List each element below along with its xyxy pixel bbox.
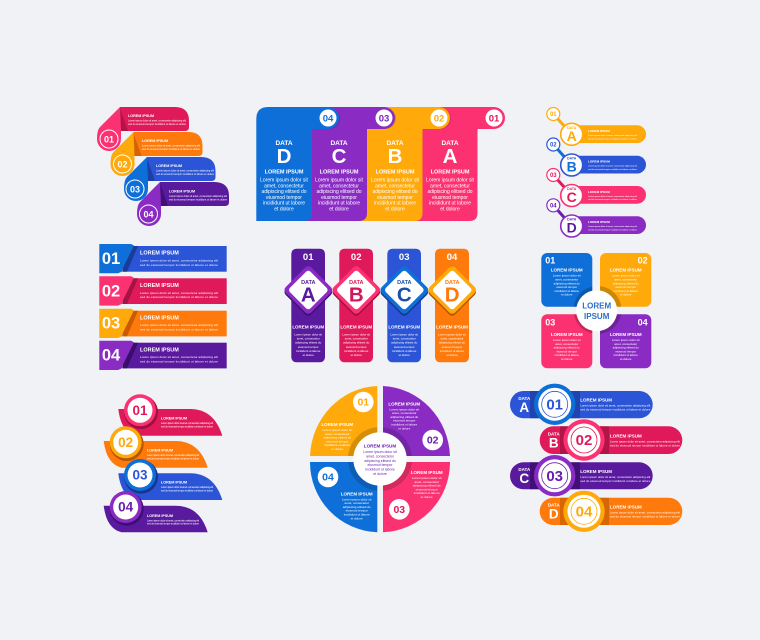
segment 04: eiusmod tempor: [346, 509, 368, 513]
square 04: Lorem ipsum dolor sit: [612, 338, 640, 342]
segment 02: 02: [427, 435, 439, 447]
row D: [547, 199, 646, 237]
ribbon 04: Lorem ipsum dolor sit amet, consectetur adipiscing elit: [169, 195, 227, 198]
center disc: amet, consectetur: [366, 454, 395, 458]
column C: incididunt ut labore: [392, 349, 417, 353]
tab B: amet, consectetur: [375, 183, 415, 189]
square 01: [541, 253, 592, 307]
column B: Lorem ipsum dolor sit: [342, 332, 370, 336]
row C: Lorem ipsum dolor sit amet, consectetur adipiscing elit: [588, 195, 637, 198]
swoosh 02: 02: [118, 435, 133, 450]
square 04: 04: [638, 318, 648, 328]
banner 04: [99, 341, 227, 370]
swoosh 03: Lorem ipsum dolor sit amet, consectetur adipiscing elit: [161, 486, 213, 489]
column A: [283, 249, 334, 362]
square 01: 01: [545, 256, 555, 266]
pill B: LOREM IPSUM: [610, 434, 642, 438]
segment 03: adipiscing elitsed do: [413, 484, 441, 488]
pill B: B: [549, 436, 559, 450]
tab A: adipiscing elitsed do: [427, 189, 473, 195]
swoosh 04: LOREM IPSUM: [147, 514, 173, 518]
square 01: et dolore: [561, 293, 573, 297]
square 02: eiusmod tempor: [615, 285, 636, 289]
banner 04: 04: [102, 347, 121, 365]
segment 04: incididunt ut labore: [344, 512, 370, 516]
banner 02: sed do eiusmod tempor incididunt ut labore et dolore: [140, 295, 218, 299]
row C: 03: [550, 173, 557, 179]
row D: DATA: [567, 218, 577, 222]
segment 04: LOREM IPSUM: [341, 491, 373, 496]
banner 03: sed do eiusmod tempor incididunt ut labore et dolore: [140, 328, 218, 332]
row A: DATA: [567, 126, 577, 130]
tab D: amet, consectetur: [264, 183, 304, 189]
pill D: LOREM IPSUM: [610, 504, 642, 510]
row D: sed do eiusmod tempor incididunt ut labore et dolore: [588, 228, 638, 231]
row A: sed do eiusmod tempor incididunt ut labore et dolore: [588, 137, 638, 140]
ribbon 04: LOREM IPSUM: [169, 190, 195, 194]
square 03: amet, consectetur: [555, 342, 578, 346]
center disc: incididunt ut labore: [365, 468, 395, 472]
tab C: LOREM IPSUM: [320, 170, 359, 176]
square 01: amet, consectetur: [555, 278, 578, 282]
column A: LOREM IPSUM: [292, 325, 324, 330]
row C: sed do eiusmod tempor incididunt ut labore et dolore: [588, 198, 638, 201]
tab D: incididunt ut labore: [263, 201, 305, 207]
column B: incididunt ut labore: [344, 349, 369, 353]
tab C: incididunt ut labore: [318, 201, 360, 207]
column D: D: [445, 284, 460, 307]
column D: adipiscing elitsed do: [439, 341, 465, 345]
banner 03: 03: [102, 315, 120, 333]
square 03: Lorem ipsum dolor sit: [553, 338, 581, 342]
column A: adipiscing elitsed do: [295, 341, 322, 345]
tab A: Lorem ipsum dolor sit: [426, 178, 475, 184]
tab B: B: [388, 145, 402, 168]
column C: et dolore: [399, 353, 410, 357]
column C: Lorem ipsum dolor sit: [390, 332, 418, 336]
segment 02: incididunt ut labore: [391, 422, 418, 426]
ribbon 01: [97, 107, 189, 151]
segment 04: et dolore: [351, 516, 363, 520]
square 04: amet, consectetur: [614, 342, 637, 346]
column A: eiusmod tempor: [298, 345, 319, 349]
row B: B: [567, 158, 577, 174]
segment 01: [310, 386, 377, 456]
ribbon 03: 03: [130, 184, 140, 194]
pill C: sed do eiusmod tempor incididunt ut labore et dolore: [580, 479, 651, 483]
column B: LOREM IPSUM: [340, 325, 372, 330]
segment 02: et dolore: [398, 426, 411, 430]
square 02: [600, 253, 651, 307]
row A: LOREM IPSUM: [588, 129, 610, 133]
square 03: eiusmod tempor: [556, 349, 577, 353]
segment 01: Lorem ipsum dolor sit: [323, 428, 352, 432]
square 01: eiusmod tempor: [556, 285, 577, 289]
tab C: amet, consectetur: [319, 183, 359, 189]
column C: LOREM IPSUM: [388, 325, 420, 330]
ribbon 01: 01: [104, 134, 114, 144]
column B: B: [349, 284, 364, 307]
swoosh 01: [118, 394, 222, 436]
panel: folded ribbon list: [97, 107, 229, 226]
row B: [547, 138, 646, 176]
column B: adipiscing elitsed do: [343, 341, 370, 345]
tab D: adipiscing elitsed do: [261, 189, 307, 195]
column B: amet, consectetur: [345, 336, 368, 340]
panel: pill bars with rings: [510, 384, 682, 532]
ribbon 03: Lorem ipsum dolor sit amet, consectetur adipiscing elit: [156, 170, 214, 172]
column A: 01: [303, 252, 314, 263]
square 03: et dolore: [561, 357, 573, 361]
tab D: LOREM IPSUM: [265, 170, 304, 176]
segment 02: LOREM IPSUM: [388, 401, 420, 406]
swoosh 02: sed do eiusmod tempor incididunt ut labore et dolore: [147, 457, 200, 460]
row B: DATA: [567, 156, 577, 160]
banner 01: 01: [102, 250, 120, 268]
row D: 04: [550, 204, 557, 210]
square 04: LOREM IPSUM: [610, 332, 642, 337]
segment 01: et dolore: [331, 447, 344, 451]
square 02: 02: [638, 256, 648, 266]
banner 01: [99, 244, 227, 273]
tab A: et dolore: [440, 206, 460, 212]
tab A: 01: [489, 114, 500, 124]
square 02: LOREM IPSUM: [610, 268, 642, 273]
segment 02: adipiscing elitsed do: [390, 415, 419, 419]
column C: eiusmod tempor: [394, 345, 415, 349]
pill A: [510, 384, 653, 425]
ribbon 01: Lorem ipsum dolor sit amet, consectetur adipiscing elit: [128, 120, 186, 122]
swoosh 04: [104, 491, 208, 532]
swoosh 04: sed do eiusmod tempor incididunt ut labore et dolore: [147, 523, 200, 526]
square 04: incididunt ut labore: [614, 353, 638, 357]
banner 04: LOREM IPSUM: [140, 347, 179, 353]
column D: 04: [447, 252, 458, 263]
ribbon 03: sed do eiusmod tempor incididunt ut labore et dolore: [156, 173, 215, 176]
tab B: et dolore: [385, 206, 405, 212]
swoosh 03: sed do eiusmod tempor incididunt ut labore et dolore: [161, 489, 214, 492]
segment 02: amet, consectetur: [392, 411, 417, 415]
swoosh 01: 01: [132, 403, 148, 418]
tab B: LOREM IPSUM: [376, 170, 415, 176]
tab B: DATA: [386, 140, 404, 147]
tab D: Lorem ipsum dolor sit: [260, 178, 309, 184]
pill B: [540, 419, 682, 461]
pill D: D: [549, 506, 559, 522]
column C: amet, consectetur: [393, 336, 416, 340]
swoosh 01: LOREM IPSUM: [161, 417, 187, 421]
row B: sed do eiusmod tempor incididunt ut labore et dolore: [588, 168, 638, 171]
row B: LOREM IPSUM: [588, 160, 610, 164]
pill A: 01: [546, 396, 563, 414]
ribbon 04: sed do eiusmod tempor incididunt ut labore et dolore: [169, 198, 228, 201]
square 01: Lorem ipsum dolor sit: [553, 274, 581, 278]
pill C: DATA: [518, 467, 531, 472]
swoosh 03: [118, 459, 222, 500]
tab A: [416, 107, 505, 221]
column A: Lorem ipsum dolor sit: [294, 332, 322, 336]
center disc: adipiscing elitsed do: [364, 459, 396, 463]
segment 02: Lorem ipsum dolor sit: [390, 407, 419, 411]
ribbon 03: [124, 157, 216, 201]
column C: C: [397, 284, 412, 307]
pill D: [540, 491, 682, 532]
tab B: [361, 107, 451, 221]
segment 03: et dolore: [421, 495, 433, 499]
tab D: D: [277, 145, 291, 168]
row A: 01: [550, 112, 557, 118]
swoosh 02: Lorem ipsum dolor sit amet, consectetur adipiscing elit: [147, 454, 199, 457]
column A: A: [301, 284, 316, 307]
center disc: LOREM IPSUM: [364, 444, 396, 448]
tab D: eiusmod tempor: [266, 195, 302, 201]
square 02: incididunt ut labore: [614, 289, 638, 293]
segment 01: incididunt ut labore: [324, 443, 351, 447]
center circle: LOREM: [582, 301, 611, 310]
column A: et dolore: [303, 353, 314, 357]
tab A: LOREM IPSUM: [431, 170, 470, 176]
column D: eiusmod tempor: [442, 345, 462, 349]
column D: LOREM IPSUM: [436, 325, 468, 330]
swoosh 01: Lorem ipsum dolor sit amet, consectetur adipiscing elit: [161, 422, 213, 425]
tab A: incididunt ut labore: [429, 201, 471, 207]
tab C: 03: [379, 114, 389, 124]
column A: incididunt ut labore: [296, 349, 321, 353]
pill D: DATA: [548, 502, 560, 508]
pill A: sed do eiusmod tempor incididunt ut labore et dolore: [580, 408, 651, 412]
square 01: incididunt ut labore: [555, 289, 579, 293]
banner 01: sed do eiusmod tempor incididunt ut labore et dolore: [140, 263, 218, 267]
pill B: Lorem ipsum dolor sit amet, consectetur adipiscing elit: [610, 439, 680, 443]
tab A: A: [443, 145, 458, 168]
row D: D: [567, 220, 577, 236]
square 04: adipiscing elitsed do: [613, 346, 639, 350]
column C: 03: [399, 252, 409, 263]
center circle: [576, 290, 617, 331]
pill D: 04: [576, 504, 593, 520]
swoosh 01: sed do eiusmod tempor incididunt ut labore et dolore: [161, 425, 214, 428]
banner 04: sed do eiusmod tempor incididunt ut labore et dolore: [140, 360, 218, 364]
segment 03: amet, consectetur: [414, 480, 439, 484]
column B: eiusmod tempor: [346, 345, 367, 349]
ribbon 03: LOREM IPSUM: [156, 164, 182, 168]
swoosh 02: [104, 426, 208, 468]
row A: [547, 108, 646, 145]
ribbon 01: sed do eiusmod tempor incididunt ut labore et dolore: [128, 123, 187, 126]
banner 02: LOREM IPSUM: [140, 283, 179, 289]
panel: diamond columns: [283, 249, 478, 362]
banner 03: LOREM IPSUM: [140, 315, 179, 321]
column C: adipiscing elitsed do: [391, 341, 418, 345]
segment 03: eiusmod tempor: [416, 487, 438, 491]
square 04: et dolore: [620, 357, 632, 361]
segment 03: [383, 462, 450, 532]
segment 02: eiusmod tempor: [393, 419, 415, 423]
swoosh 03: 03: [132, 468, 148, 483]
ribbon 02: 02: [117, 159, 128, 169]
center disc: et dolore: [373, 472, 387, 476]
tab C: adipiscing elitsed do: [316, 189, 362, 195]
banner 01: LOREM IPSUM: [140, 251, 179, 257]
banner 02: Lorem ipsum dolor sit amet, consectetur adipiscing elit: [140, 291, 218, 295]
pill A: DATA: [518, 396, 531, 401]
pill B: sed do eiusmod tempor incididunt ut labore et dolore: [610, 443, 680, 447]
segment 01: amet, consectetur: [325, 432, 350, 436]
tab D: [256, 107, 340, 221]
column C: [379, 249, 430, 362]
row D: LOREM IPSUM: [588, 220, 610, 224]
segment 02: [383, 386, 450, 456]
swoosh 02: LOREM IPSUM: [147, 449, 173, 453]
square 03: adipiscing elitsed do: [554, 346, 580, 350]
tab B: incididunt ut labore: [374, 201, 416, 207]
ribbon 02: Lorem ipsum dolor sit amet, consectetur adipiscing elit: [142, 144, 200, 148]
column D: Lorem ipsum dolor sit: [438, 332, 466, 336]
row C: LOREM IPSUM: [588, 190, 610, 194]
tab B: Lorem ipsum dolor sit: [371, 178, 420, 184]
row B: 02: [550, 143, 557, 149]
row A: A: [567, 128, 577, 144]
column A: DATA: [301, 280, 316, 286]
tab B: adipiscing elitsed do: [372, 189, 418, 195]
pill A: A: [519, 400, 529, 415]
square 01: adipiscing elitsed do: [554, 281, 580, 285]
tab C: et dolore: [329, 206, 349, 212]
tab A: amet, consectetur: [430, 183, 470, 189]
column B: 02: [351, 252, 361, 263]
tab C: DATA: [330, 140, 348, 147]
tab C: eiusmod tempor: [321, 195, 357, 201]
square 01: LOREM IPSUM: [551, 268, 583, 273]
pill C: C: [519, 471, 529, 486]
tab D: et dolore: [274, 206, 294, 212]
panel: four squares around circle: [541, 253, 651, 368]
row B: Lorem ipsum dolor sit amet, consectetur adipiscing elit: [588, 164, 637, 168]
center circle: IPSUM: [584, 312, 610, 321]
tab D: 04: [323, 114, 334, 124]
segment 03: incididunt ut labore: [414, 491, 440, 495]
center disc: [353, 432, 407, 486]
segment 04: Lorem ipsum dolor sit: [342, 497, 372, 501]
square 03: incididunt ut labore: [555, 353, 579, 357]
pill C: [510, 455, 653, 496]
pill B: DATA: [548, 432, 560, 436]
segment 01: adipiscing elitsed do: [323, 436, 352, 440]
banner 04: Lorem ipsum dolor sit amet, consectetur adipiscing elit: [140, 355, 218, 359]
panel: segmented pie: [310, 386, 450, 532]
swoosh 04: Lorem ipsum dolor sit amet, consectetur adipiscing elit: [147, 519, 199, 522]
column D: et dolore: [446, 353, 458, 357]
column D: amet, consectetur: [441, 336, 464, 340]
tab D: DATA: [275, 140, 293, 147]
segment 04: amet, consectetur: [344, 501, 369, 505]
square 02: Lorem ipsum dolor sit: [612, 274, 640, 278]
segment 01: 01: [357, 397, 369, 409]
square 03: 03: [545, 318, 555, 328]
tab B: eiusmod tempor: [377, 195, 413, 201]
banner 02: 02: [102, 282, 120, 300]
column A: amet, consectetur: [297, 336, 320, 340]
tab C: Lorem ipsum dolor sit: [315, 178, 364, 184]
banner 03: [99, 309, 227, 338]
pill A: LOREM IPSUM: [580, 398, 612, 403]
segment 03: Lorem ipsum dolor sit: [412, 476, 442, 480]
ribbon 02: sed do eiusmod tempor incididunt ut labore et dolore: [142, 148, 201, 151]
tab C: C: [332, 145, 347, 168]
panel: stacked swoosh list: [104, 394, 222, 532]
banner 01: Lorem ipsum dolor sit amet, consectetur adipiscing elit: [140, 258, 218, 262]
ribbon 02: [110, 132, 202, 176]
column B: et dolore: [351, 353, 362, 357]
pill C: LOREM IPSUM: [580, 469, 612, 474]
panel: connected circle bars: [547, 108, 646, 237]
square 03: LOREM IPSUM: [551, 332, 583, 337]
tab B: 02: [434, 114, 444, 124]
ribbon 01: LOREM IPSUM: [128, 114, 154, 118]
square 02: amet, consectetur: [614, 278, 637, 282]
segment 03: 03: [393, 504, 405, 516]
square 02: et dolore: [620, 293, 632, 297]
row A: Lorem ipsum dolor sit amet, consectetur adipiscing elit: [588, 134, 637, 137]
column C: DATA: [397, 280, 412, 286]
row C: C: [567, 189, 577, 205]
center disc: eiusmod tempor: [367, 463, 393, 467]
column B: [331, 249, 382, 362]
swoosh 03: LOREM IPSUM: [161, 481, 187, 485]
ribbon 04: 04: [143, 209, 154, 219]
segment 01: LOREM IPSUM: [321, 422, 353, 427]
row D: Lorem ipsum dolor sit amet, consectetur adipiscing elit: [588, 225, 637, 228]
pill C: Lorem ipsum dolor sit amet, consectetur adipiscing elit: [580, 475, 650, 479]
ribbon 04: [137, 182, 229, 226]
ribbon 02: LOREM IPSUM: [142, 139, 168, 143]
pill C: 03: [546, 468, 563, 485]
center disc: Lorem ipsum dolor sit: [363, 450, 397, 454]
row C: [547, 168, 646, 206]
segment 01: eiusmod tempor: [326, 439, 348, 443]
square 04: [600, 314, 651, 368]
banner 02: [99, 276, 227, 306]
tab A: DATA: [441, 140, 459, 147]
column D: DATA: [445, 280, 459, 286]
tab C: [305, 107, 396, 221]
square 03: [541, 314, 592, 368]
column D: [427, 249, 478, 362]
banner 03: Lorem ipsum dolor sit amet, consectetur adipiscing elit: [140, 323, 218, 327]
segment 04: [310, 462, 377, 532]
segment 04: adipiscing elitsed do: [343, 505, 371, 509]
pill B: 02: [576, 432, 592, 449]
segment 04: 04: [322, 472, 334, 484]
tab A: eiusmod tempor: [432, 195, 468, 201]
panel: numbered banners: [99, 244, 227, 370]
panel: overlapping data tabs: [256, 107, 505, 221]
pill D: Lorem ipsum dolor sit amet, consectetur adipiscing elit: [610, 510, 680, 514]
row C: DATA: [567, 187, 577, 191]
swoosh 04: 04: [118, 500, 134, 515]
square 04: eiusmod tempor: [615, 349, 636, 353]
column D: incididunt ut labore: [440, 349, 465, 353]
column B: DATA: [349, 280, 364, 286]
square 02: adipiscing elitsed do: [613, 281, 639, 285]
pill A: Lorem ipsum dolor sit amet, consectetur adipiscing elit: [580, 404, 650, 408]
segment 03: LOREM IPSUM: [411, 470, 443, 475]
pill D: sed do eiusmod tempor incididunt ut labore et dolore: [610, 514, 680, 518]
